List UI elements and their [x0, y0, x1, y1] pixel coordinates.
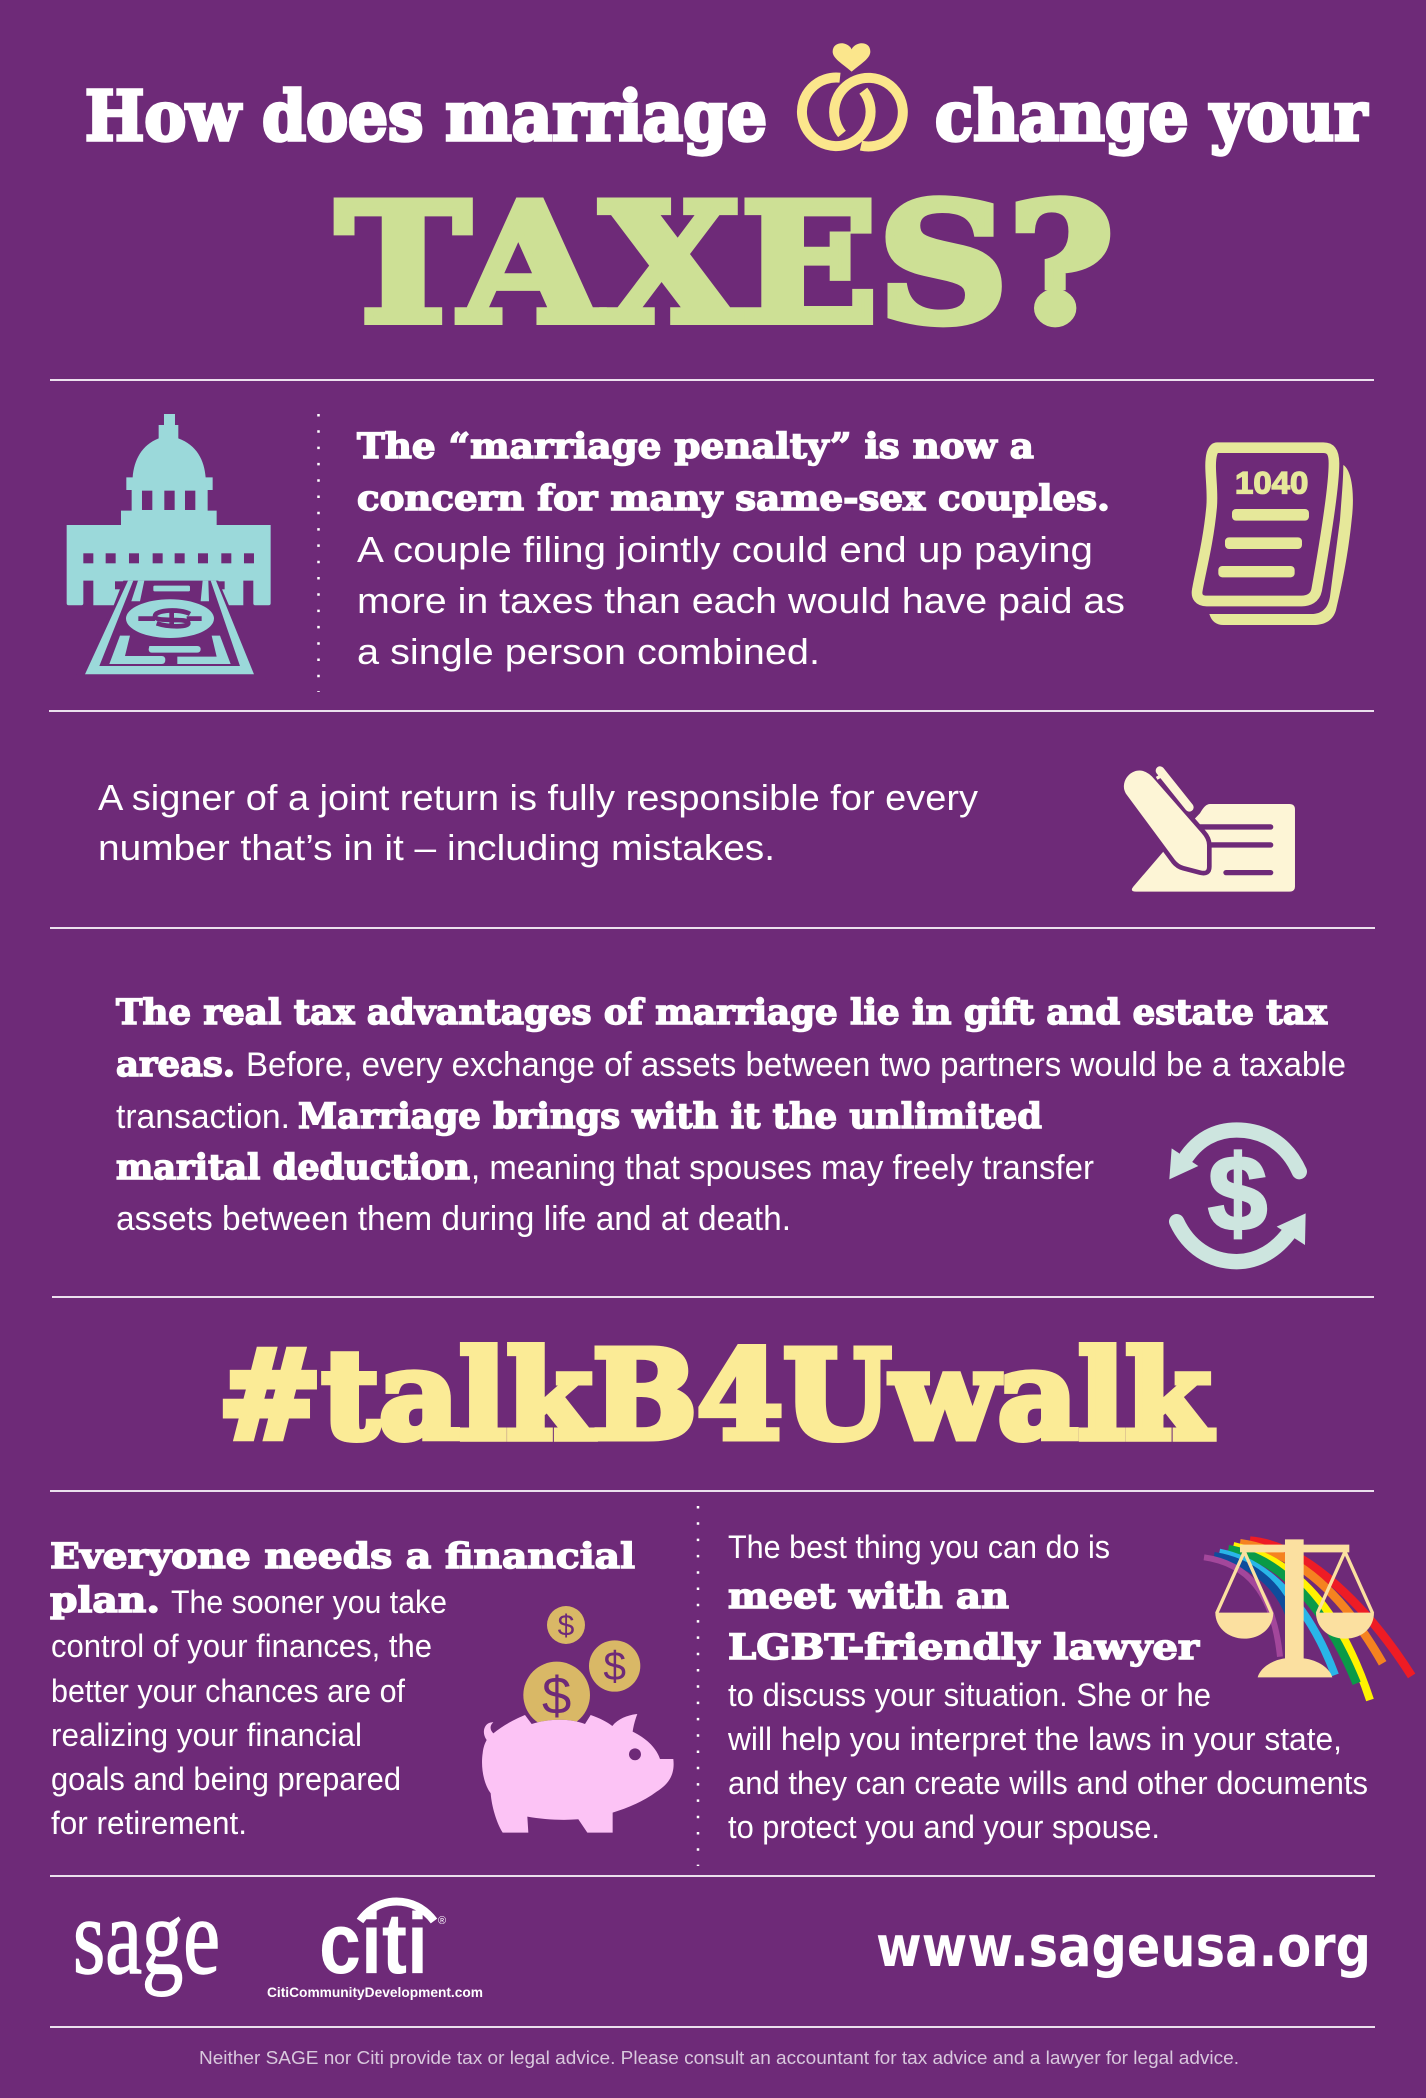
icon: circular arrows with dollar sign: $ [1208, 1133, 1267, 1253]
text block: lgbt friendly lawyer: meet with an [728, 1576, 1009, 1617]
text block: joint return: number that’s in it – including mistakes. [98, 827, 775, 868]
dotted divider top [317, 414, 320, 692]
title: taxes: TAXES? [336, 167, 1114, 360]
icon: capitol building with dollar bill road [40, 414, 300, 680]
icon: piggy bank with coins: $ [558, 1610, 575, 1643]
text block: tax advantages: , meaning that spouses may freely transfer [471, 1149, 1094, 1187]
text block: financial plan: The sooner you take [171, 1584, 447, 1620]
text block: lgbt friendly lawyer: to protect you and your spouse. [728, 1809, 1160, 1845]
text block: lgbt friendly lawyer: and they can create wills and other documents [728, 1765, 1368, 1801]
icon: piggy bank with coins [482, 1606, 674, 1833]
title: how does marriage change your [85, 77, 1368, 157]
hashtag heading: #talkB4Uwalk [218, 1323, 1213, 1467]
icon: pen signing document [1122, 768, 1295, 892]
text block: marriage penalty [357, 426, 1125, 672]
text block: tax advantages: Before, every exchange of assets between two partners would be a taxable [246, 1046, 1346, 1084]
disclaimer: Neither SAGE nor Citi provide tax or legal advice. Please consult an accountant for tax advice and a lawyer for legal advice. [199, 2048, 1239, 2068]
text block: financial plan: plan. [50, 1580, 160, 1621]
dotted divider bottom [697, 1506, 699, 1866]
text block: financial plan [50, 1536, 635, 1841]
title: how does marriage change your: change your [935, 77, 1368, 157]
text block: financial plan: control of your finances, the [51, 1628, 432, 1664]
text block: marriage penalty: a single person combined. [357, 631, 820, 672]
text block: lgbt friendly lawyer: LGBT-friendly lawyer [728, 1627, 1200, 1668]
website url: www.sageusa.org [876, 1915, 1371, 1980]
icon: rainbow scales of justice [1204, 1539, 1412, 1700]
text block: lgbt friendly lawyer: to discuss your situation. She or he [728, 1677, 1211, 1713]
title: how does marriage change your: How does marriage [85, 77, 767, 157]
logo: citi [267, 1896, 483, 2000]
text block: financial plan: better your chances are of [51, 1673, 405, 1709]
text block: tax advantages: assets between them during life and at death. [116, 1200, 791, 1238]
text block: financial plan: goals and being prepared [51, 1761, 401, 1797]
text block: marriage penalty: The “marriage penalty” is now a [357, 426, 1034, 467]
text block: tax advantages [116, 992, 1346, 1238]
text block: financial plan: for retirement. [51, 1805, 247, 1841]
logo: citi: ® [438, 1915, 446, 1927]
icon: interlocked wedding rings with heart [802, 43, 903, 146]
icon: 1040 tax form [1197, 448, 1353, 625]
logo: citi: CitiCommunityDevelopment.com [267, 1984, 483, 2000]
text block: marriage penalty: A couple filing jointly could end up paying [357, 529, 1093, 570]
icon: piggy bank with coins: $ [603, 1643, 626, 1689]
text block: tax advantages: The real tax advantages of marriage lie in gift and estate tax [116, 992, 1328, 1033]
text block: tax advantages: marital deduction [116, 1147, 470, 1188]
logo: sage: sage [73, 1878, 220, 1997]
icon: piggy bank with coins: $ [542, 1667, 571, 1726]
text block: marriage penalty: more in taxes than each would have paid as [357, 580, 1125, 621]
icon: 1040 tax form: 1040 [1235, 465, 1308, 500]
text block: joint return: A signer of a joint return is fully responsible for every [98, 777, 978, 818]
text block: marriage penalty: concern for many same-sex couples. [357, 478, 1110, 519]
logo: citi: citi [319, 1896, 428, 1992]
text block: tax advantages: areas. [116, 1044, 235, 1085]
text block: financial plan: realizing your financial [51, 1717, 362, 1753]
icon: circular arrows with dollar sign [1169, 1130, 1306, 1262]
text block: lgbt friendly lawyer [727, 1529, 1368, 1845]
text block: tax advantages: transaction. [116, 1098, 290, 1136]
text block: lgbt friendly lawyer: will help you interpret the laws in your state, [727, 1721, 1342, 1757]
text block: financial plan: Everyone needs a financial [50, 1536, 635, 1577]
text block: lgbt friendly lawyer: The best thing you can do is [728, 1529, 1110, 1565]
text block: joint return [98, 777, 978, 868]
text block: tax advantages: Marriage brings with it the unlimited [298, 1096, 1042, 1137]
